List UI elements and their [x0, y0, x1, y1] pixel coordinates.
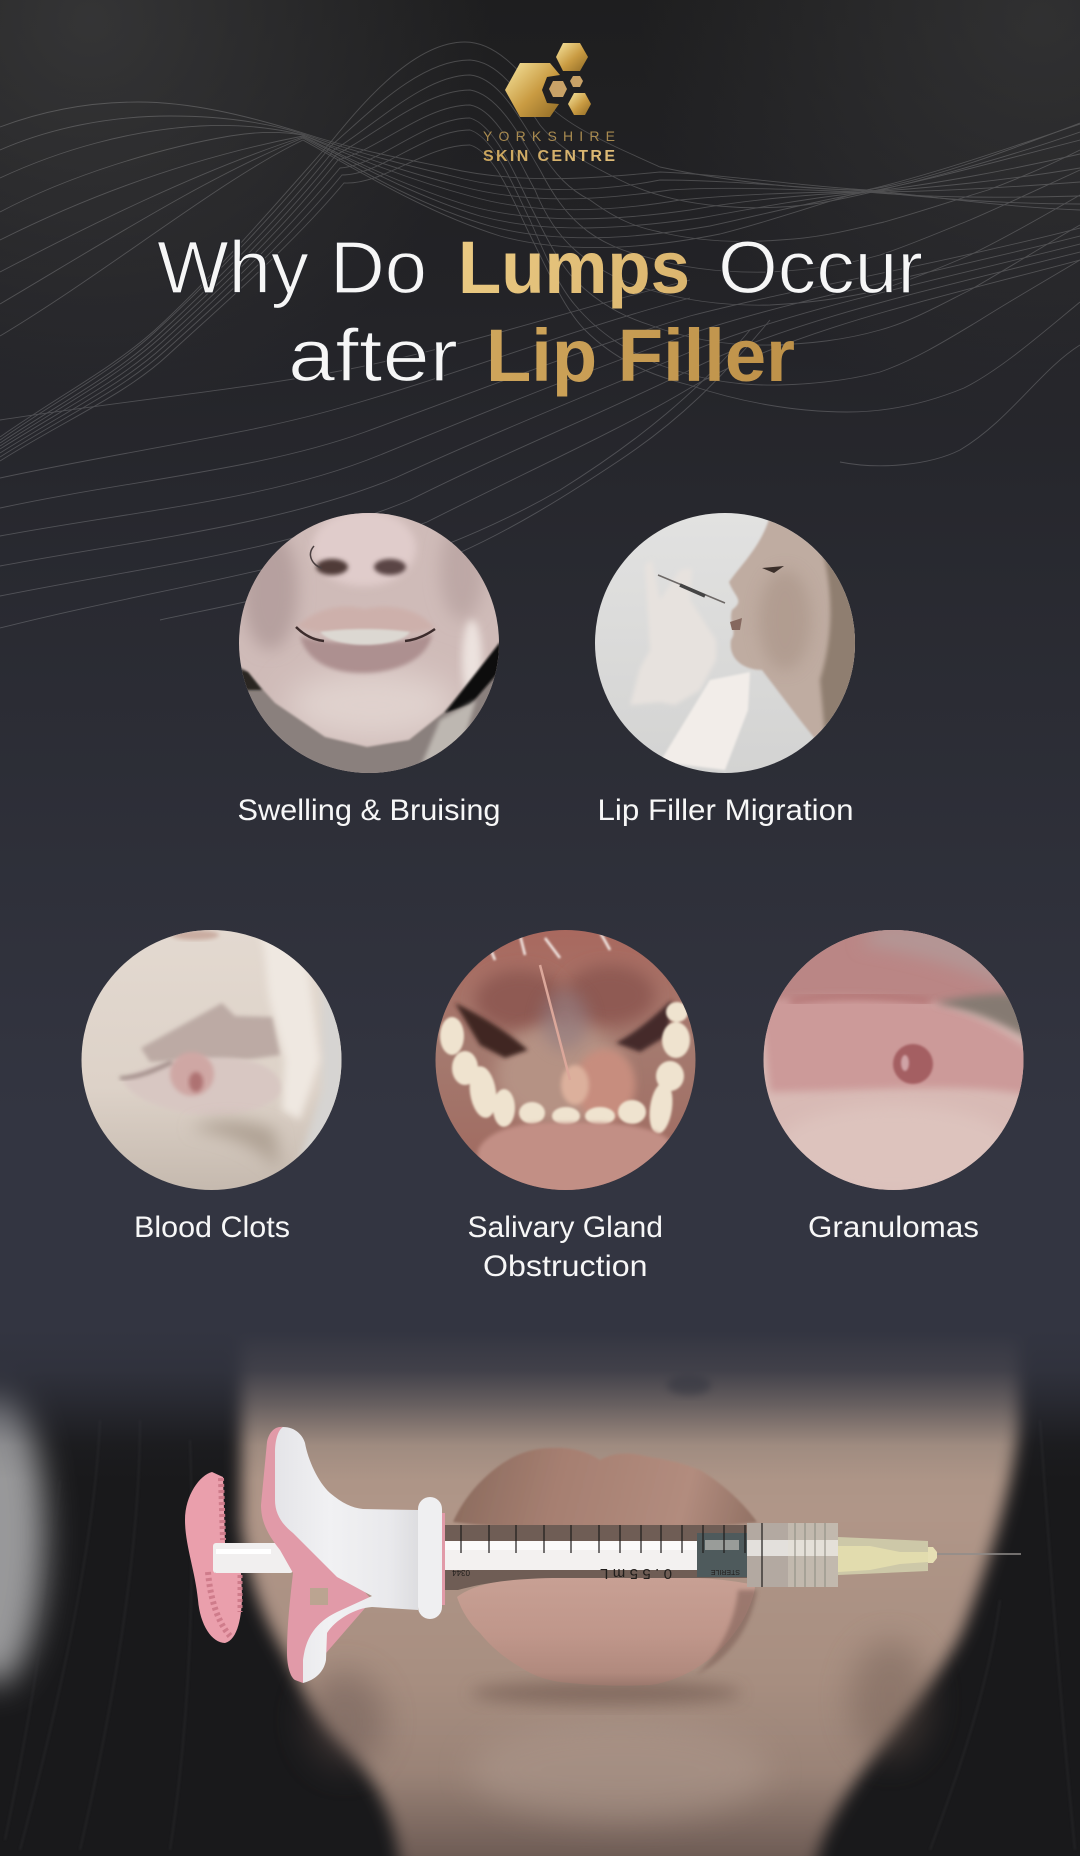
label: Blood Clots [134, 1211, 290, 1244]
logo wordmark: YORKSHIRE [483, 128, 615, 144]
panel: granulomas [760, 925, 1030, 1244]
panel: salivary gland obstruction [434, 928, 698, 1283]
lips [444, 1448, 760, 1686]
finger flange [261, 1427, 445, 1683]
photo: swollen lips [239, 513, 499, 773]
label: Obstruction [483, 1250, 648, 1283]
photo: injection in profile [595, 513, 860, 773]
icon: gold honeycomb hexagons [505, 43, 591, 117]
lot marking: 0344 [452, 1568, 470, 1577]
photo: lip nodule [760, 925, 1030, 1195]
plunger pad and rod [185, 1472, 293, 1643]
logo [483, 43, 615, 165]
title: Lumps [458, 226, 690, 309]
logo wordmark [483, 128, 615, 165]
wave line pattern [0, 42, 1080, 628]
photo: lip lump [81, 930, 345, 1192]
panel: swelling and bruising [236, 510, 510, 827]
needle hub and needle [838, 1537, 1021, 1575]
label [468, 1211, 663, 1283]
photo: lips with syringe [0, 1300, 1080, 1856]
panel: lip filler migration [595, 513, 860, 827]
label: Swelling & Bruising [238, 794, 500, 827]
label: Lip Filler Migration [598, 794, 854, 827]
label: Salivary Gland [468, 1211, 663, 1244]
label: Granulomas [808, 1211, 979, 1244]
syringe barrel [442, 1523, 838, 1587]
title [157, 226, 923, 397]
sterile marking: STERILE [710, 1568, 740, 1575]
barrel marking: 0.55mL [600, 1565, 672, 1582]
panel: blood clots [81, 930, 345, 1244]
logo wordmark: SKIN CENTRE [483, 148, 615, 165]
title: Occur [718, 226, 923, 309]
title: after [288, 314, 458, 397]
title: Lip Filler [486, 314, 795, 397]
photo: underside of tongue [434, 928, 698, 1195]
hair and face [0, 1300, 1080, 1856]
title: Why Do [157, 226, 427, 309]
